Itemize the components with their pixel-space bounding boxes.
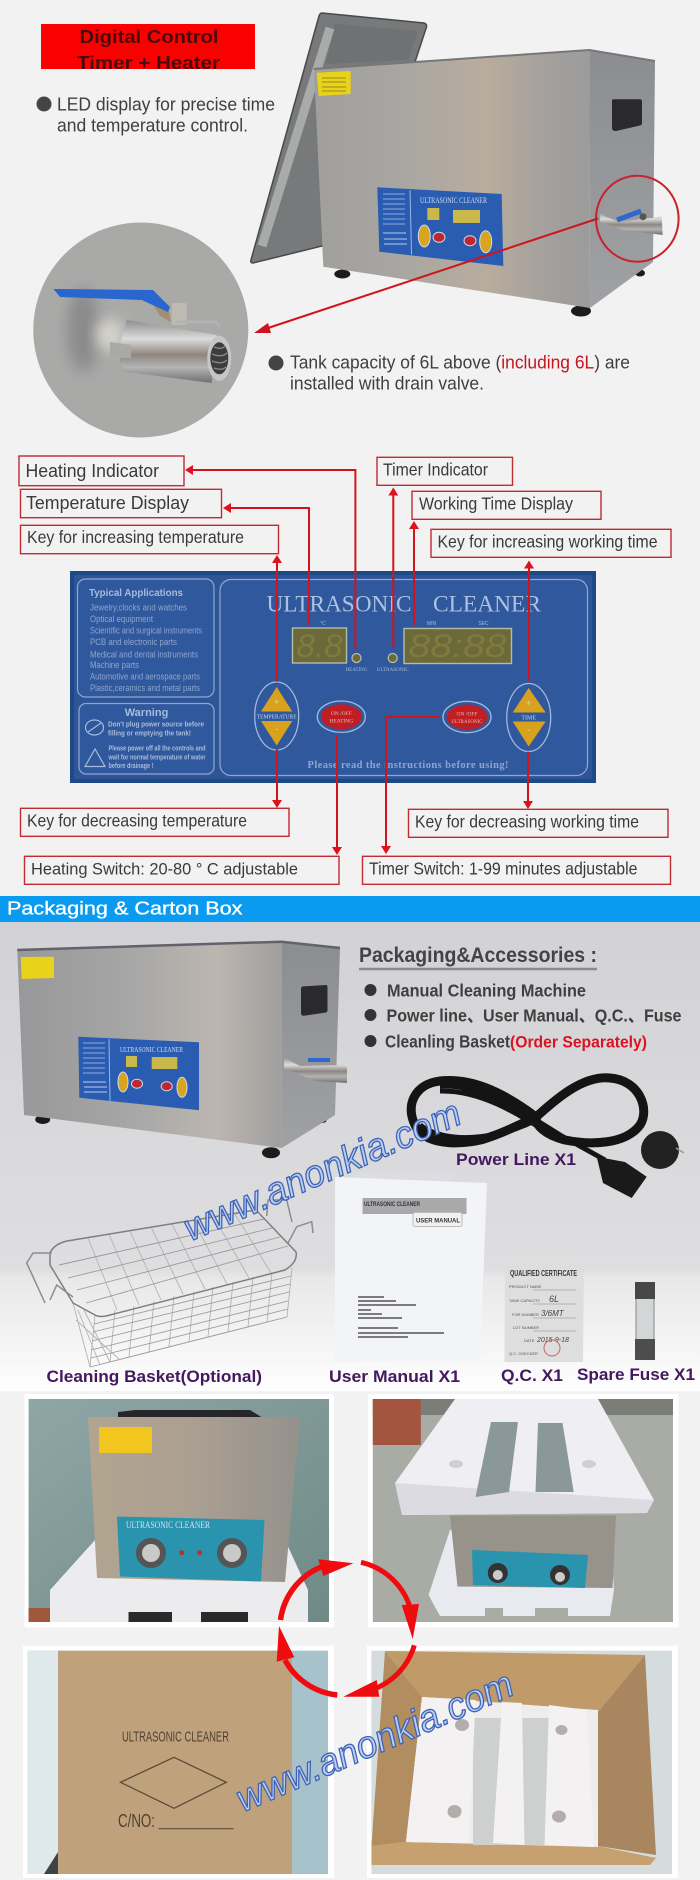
label: heating switch <box>24 856 339 884</box>
caption: power line: Power Line X1 <box>456 1150 576 1169</box>
callout: red circle around valve <box>596 176 679 262</box>
illustration: user manual: USER MANUAL <box>416 1218 460 1224</box>
photo: closed carton: ULTRASONIC CLEANER <box>122 1728 229 1746</box>
button: heating on off: HEATING <box>329 718 353 724</box>
illustration: qualified certificate: FOR NUMBER <box>512 1312 539 1317</box>
indicator: heating: HEATING <box>346 668 368 673</box>
illustration: qualified certificate: DATE <box>524 1338 535 1343</box>
illustration: user manual <box>335 1170 487 1362</box>
photo: foam on top <box>368 1394 678 1628</box>
arrow: key increasing temperature <box>272 555 282 682</box>
photo: closed carton <box>23 1646 334 1878</box>
box: warning: before drainage ! <box>108 761 154 770</box>
text block: led display <box>36 94 275 136</box>
indicator: heating <box>346 654 368 673</box>
text block: tank capacity: Tank capacity of 6L above (including 6L) are <box>290 352 630 372</box>
heading: digital control <box>41 24 255 73</box>
heading: digital control: Digital Control <box>80 26 218 47</box>
label: key decreasing temperature: Key for decreasing temperature <box>27 810 247 830</box>
label: timer switch: Timer Switch: 1-99 minutes adjustable <box>369 858 638 878</box>
panel: digital control product view <box>33 13 679 438</box>
basket rim <box>50 1210 296 1316</box>
arrow: key decreasing working time <box>523 752 533 809</box>
illustration: power cable <box>411 1078 684 1198</box>
heading band: packaging and carton box <box>0 896 700 922</box>
photo: machine on foam <box>24 1394 334 1628</box>
button: ultrasonic on off <box>443 701 491 733</box>
arrow: timer switch <box>381 717 440 854</box>
illustration: wire basket <box>27 1200 313 1367</box>
icon: caution triangle <box>85 749 105 766</box>
illustration: qualified certificate: QUALIFIED CERTIFICATE <box>510 1268 577 1278</box>
arrow: timer indicator <box>388 488 398 648</box>
upper foam <box>395 1399 654 1515</box>
box: warning: wait for normal temperature of water <box>108 752 206 762</box>
arrow: heating switch <box>332 735 342 855</box>
list: accessories: (Order Separately) <box>510 1032 647 1052</box>
caption: qc: Q.C. X1 <box>501 1366 563 1385</box>
display: working time <box>404 621 512 664</box>
label: key decreasing working time <box>408 809 668 837</box>
knob panel: ULTRASONIC CLEANER <box>126 1520 210 1530</box>
machine control panel: ULTRASONIC CLEANER <box>120 1045 183 1054</box>
arrow: key increasing working time <box>524 560 534 681</box>
illustration: cleaning machine <box>17 942 347 1158</box>
arrow: key decreasing temperature <box>272 749 282 808</box>
box: typical applications: Scientific and surgical instruments <box>90 626 202 636</box>
illustration: spare fuse <box>635 1282 655 1360</box>
illustration: qualified certificate: Q.C. CHECKER <box>509 1351 538 1356</box>
panel: control panel diagram <box>19 456 671 884</box>
illustration: user manual: ULTRASONIC CLEANER <box>364 1202 421 1208</box>
display: working time: 88:88 <box>408 628 507 664</box>
illustration: qualified certificate: TANK CAPACITY <box>509 1298 541 1303</box>
box: typical applications: Machine parts <box>90 660 139 671</box>
lower foam <box>428 1530 614 1616</box>
caption: spare fuse: Spare Fuse X1 <box>577 1365 695 1384</box>
box: typical applications: Plastic,ceramics and metal parts <box>90 683 200 694</box>
display: temperature <box>292 621 346 664</box>
box: warning: filling or emptying the tank! <box>108 728 191 738</box>
text block: tank capacity <box>268 352 630 394</box>
label: key increasing temperature: Key for increasing temperature <box>27 527 244 547</box>
heading: digital control: Timer + Heater <box>77 52 220 73</box>
illustration: qualified certificate <box>504 1257 584 1362</box>
label: working time display <box>412 491 601 519</box>
arrow: bottom right <box>343 1645 414 1697</box>
basket handles <box>27 1200 313 1303</box>
list: accessories <box>364 980 682 1052</box>
foam base <box>50 1540 308 1622</box>
key: time up and down <box>507 684 551 752</box>
small control panel <box>377 187 503 266</box>
key: temperature up and down: - <box>275 724 278 734</box>
key: time up and down: - <box>527 725 530 735</box>
icon: plug <box>641 1131 679 1169</box>
indicator: ultrasonic: ULTRASONIC <box>377 668 409 673</box>
label: key increasing temperature <box>20 525 278 554</box>
illustration: drain valve close-up <box>33 222 248 438</box>
icon: drain valve small <box>600 211 663 235</box>
arrow: heating indicator <box>185 465 355 649</box>
heading: packaging and accessories: Packaging&Accessories : <box>359 944 597 967</box>
display: working time: MIN <box>427 621 436 627</box>
title: ultrasonic cleaner <box>266 592 542 616</box>
label: temperature display <box>20 489 222 518</box>
box: warning: Warning <box>125 707 168 719</box>
label: key increasing working time: Key for increasing working time <box>438 532 658 552</box>
section background <box>0 921 700 1391</box>
machine control panel <box>78 1037 199 1110</box>
illustration: qualified certificate: 6L <box>549 1294 559 1304</box>
notice: read instructions: Please read the instructions before using! <box>308 760 508 771</box>
illustration: qualified certificate: 3/6MT <box>541 1309 565 1318</box>
label: key increasing working time <box>431 529 671 557</box>
small control panel: ULTRASONIC CLEANER <box>420 196 487 205</box>
key: time up and down: + <box>526 698 531 708</box>
label: key decreasing temperature <box>20 808 289 836</box>
arrow: temperature display <box>223 503 309 625</box>
box: typical applications: Jewelry,clocks and watches <box>90 602 187 614</box>
icon: handle <box>612 99 642 131</box>
label: timer indicator: Timer Indicator <box>383 460 488 480</box>
illustration: qualified certificate: LOT NUMBER <box>513 1325 539 1330</box>
label: timer indicator <box>377 457 512 485</box>
title: ultrasonic cleaner: CLEANER <box>433 592 542 616</box>
panel: carton packing photos <box>23 1394 678 1878</box>
label: heating indicator: Heating Indicator <box>26 460 159 481</box>
icon: machine drain valve <box>284 1057 347 1083</box>
illustration: qualified certificate: 2015-9-18 <box>536 1337 569 1344</box>
box: typical applications: Medical and dental instruments <box>90 650 198 660</box>
photo: open carton <box>367 1646 678 1878</box>
icon: power connector <box>597 1157 647 1198</box>
blue control panel <box>72 573 594 781</box>
display: temperature: °C <box>320 621 326 627</box>
lid <box>251 13 427 263</box>
arrow: top left <box>280 1559 353 1620</box>
photo: closed carton: C/NO: <box>118 1811 155 1831</box>
arrow: bottom left <box>277 1626 337 1695</box>
list: accessories: Cleanling Basket <box>385 1032 510 1052</box>
box: typical applications: Optical equipment <box>90 614 153 625</box>
yellow warning label <box>99 1427 152 1453</box>
icon: prohibited <box>86 720 104 735</box>
heading band: packaging and carton box: Packaging & Carton Box <box>7 898 242 918</box>
label: working time display: Working Time Display <box>419 494 573 514</box>
button: heating on off: ON /OFF <box>331 711 352 717</box>
label: temperature display: Temperature Display <box>26 492 190 513</box>
box: warning: Don't plug power source before <box>108 720 204 728</box>
arrow: valve to close-up <box>254 218 598 333</box>
panel: packaging section <box>0 896 700 1391</box>
label: heating switch: Heating Switch: 20-80 ° C adjustable <box>31 860 298 878</box>
caption: user manual: User Manual X1 <box>329 1367 460 1386</box>
label: heating indicator <box>19 456 184 486</box>
box: warning: Please power off all the controls and <box>108 744 206 752</box>
title: ultrasonic cleaner: ULTRASONIC <box>266 592 412 616</box>
illustration: qualified certificate: PRODUCT NAME <box>509 1284 542 1289</box>
knob panel <box>117 1516 264 1582</box>
display: working time: SEC <box>478 621 489 627</box>
label: timer switch <box>362 856 670 884</box>
illustration: ultrasonic tank with lid <box>251 13 663 316</box>
caption: cleaning basket: Cleaning Basket(Optional) <box>46 1367 262 1386</box>
label: key decreasing working time: Key for decreasing working time <box>415 812 639 832</box>
icon: machine handle <box>301 985 328 1016</box>
box: typical applications <box>78 579 214 697</box>
list: accessories: Manual Cleaning Machine <box>387 980 586 1000</box>
box: typical applications: Typical Applications <box>89 587 183 599</box>
box: main control area <box>220 580 588 776</box>
arrows: circular red cycle <box>277 1559 419 1697</box>
button: heating on off <box>317 701 365 732</box>
box: warning <box>79 704 214 774</box>
key: time up and down: TIME <box>521 716 536 722</box>
text block: led display: and temperature control. <box>57 114 248 136</box>
key: temperature up and down: + <box>274 697 279 707</box>
watermark: bottom: www.anonkia.com <box>230 1663 520 1821</box>
text block: led display: LED display for precise time <box>57 94 275 114</box>
arrow: working time display <box>409 521 419 625</box>
arrow: top right <box>361 1562 419 1639</box>
text block: tank capacity: installed with drain valve. <box>290 372 484 394</box>
button: ultrasonic on off: ON /OFF <box>457 712 477 718</box>
indicator: ultrasonic <box>377 654 409 673</box>
button: ultrasonic on off: ULTRASONIC <box>451 720 483 725</box>
list: accessories: Power line、User Manual、Q.C.、Fuse <box>386 1006 682 1026</box>
key: temperature up and down <box>255 682 299 750</box>
display: temperature: 8.8 <box>296 628 343 664</box>
box: typical applications: PCB and electronic parts <box>90 637 177 648</box>
watermark: top: www.anonkia.com <box>177 1092 468 1250</box>
key: temperature up and down: TEMPERATURE <box>257 714 297 720</box>
box: typical applications: Automotive and aerospace parts <box>90 672 200 682</box>
